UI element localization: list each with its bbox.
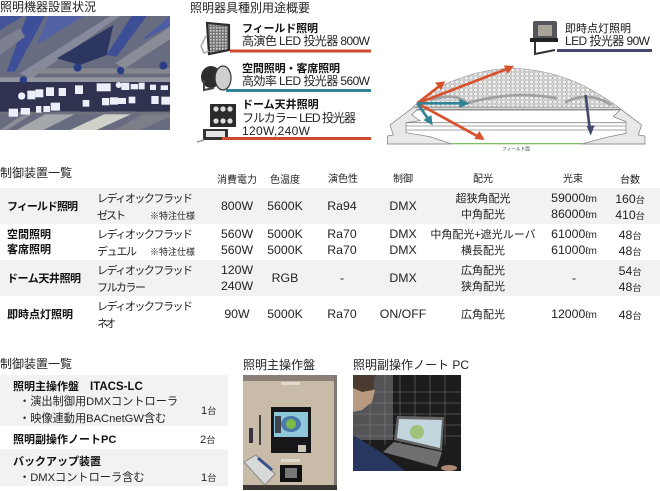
- heading: lighting installation status: 照明機器設置状況: [0, 0, 96, 14]
- table row: instant-on lighting: 12000ℓm: [551, 307, 597, 321]
- legend: dome ceiling lighting fixture: [197, 97, 371, 142]
- heading: control equipment list: 制御装置一覧: [0, 356, 72, 371]
- heading: control equipment table: 制御装置一覧: [0, 165, 72, 180]
- table row: space and seating lighting: デュエル: [97, 244, 137, 258]
- diagram: dome cross-section with light directions: [387, 65, 645, 152]
- table row: space and seating lighting: 客席照明: [7, 242, 51, 256]
- table row: space and seating lighting: 560W: [221, 243, 253, 257]
- list item: main lighting console: ・演出制御用DMXコントローラ: [19, 394, 178, 408]
- table row: instant-on lighting: [7, 299, 641, 330]
- table row: dome ceiling lighting: 48台: [619, 280, 641, 294]
- table row: field lighting: 59000ℓm: [551, 191, 597, 205]
- label: field lighting: フィールド照明: [242, 22, 318, 35]
- table row: instant-on lighting: ネオ: [97, 317, 116, 330]
- table row: field lighting: 86000ℓm: [551, 207, 597, 221]
- leader line: dome: [222, 137, 371, 140]
- table row: dome ceiling lighting: 240W: [221, 279, 253, 293]
- list item: sub-console notebook PC: 2台: [200, 434, 215, 446]
- list item: main lighting console: ・映像連動用BACnetGW含む: [19, 411, 166, 425]
- table row: instant-on lighting: 広角配光: [461, 307, 505, 321]
- table header: [217, 172, 640, 186]
- table row: instant-on lighting: 48台: [619, 308, 641, 322]
- spec: dome lighting wattage: 120W,240W: [242, 124, 311, 138]
- table header: 消費電力: [217, 173, 257, 186]
- table header: 配光: [473, 172, 493, 185]
- list item: sub-console notebook PC: [13, 432, 215, 446]
- list item: backup device: 1台: [201, 472, 216, 484]
- table row: space and seating lighting: ※特注仕様: [150, 246, 195, 257]
- table row: space and seating lighting: [7, 227, 641, 258]
- table row: space and seating lighting: 5000K: [267, 227, 304, 241]
- table row: instant-on lighting: 5000K: [267, 307, 304, 321]
- heading: sub-console notebook PC photo: 照明副操作ノート PC: [353, 357, 469, 372]
- spec: dome lighting type: フルカラー LED 投光器: [242, 110, 356, 125]
- table row: field lighting: 5600K: [267, 199, 304, 213]
- table row: field lighting: DMX: [389, 199, 417, 213]
- table row: instant-on lighting: ON/OFF: [380, 307, 427, 321]
- list item: backup device: ・DMXコントローラ含む: [19, 471, 145, 484]
- table row: space and seating lighting: レディオックフラッド: [97, 227, 193, 241]
- table header: 演色性: [328, 172, 358, 185]
- table header: 台数: [620, 173, 640, 186]
- photo: lights mounted on roof truss: [0, 16, 170, 130]
- table row: field lighting: [0, 188, 660, 224]
- table row: field lighting: レディオックフラッド: [97, 191, 193, 205]
- list item: main lighting console: 1台: [201, 405, 216, 417]
- table row: dome ceiling lighting: -: [340, 271, 344, 285]
- spec: space lighting: 高効率 LED 投光器 560W: [242, 73, 371, 88]
- legend: field lighting fixture: [201, 22, 371, 54]
- table row: instant-on lighting: レディオックフラッド: [97, 299, 193, 313]
- list item: main lighting console: [0, 375, 228, 426]
- table row: space and seating lighting: 空間照明: [7, 227, 51, 241]
- spec: instant-on lighting: LED 投光器 90W: [565, 33, 651, 48]
- list item: backup device: [0, 449, 228, 486]
- table row: space and seating lighting: 61000ℓm: [551, 227, 597, 241]
- table row: dome ceiling lighting: 狭角配光: [461, 279, 505, 293]
- table row: field lighting: 800W: [221, 199, 253, 213]
- table row: space and seating lighting: 48台: [619, 228, 641, 242]
- table row: field lighting: 410台: [615, 208, 645, 222]
- legend: instant-on lighting fixture: [530, 21, 652, 54]
- spec: field lighting: 高演色 LED 投光器 800W: [242, 33, 371, 48]
- table row: space and seating lighting: 560W: [221, 227, 253, 241]
- photo: main console panel: [243, 375, 337, 490]
- table row: dome ceiling lighting: ドーム天井照明: [7, 271, 81, 285]
- table row: dome ceiling lighting: 54台: [619, 264, 641, 278]
- table row: field lighting: 超狭角配光: [456, 191, 510, 205]
- table row: dome ceiling lighting: 120W: [221, 263, 253, 277]
- table row: field lighting: ※特注仕様: [150, 210, 195, 221]
- table row: space and seating lighting: 中角配光+遮光ルーバ: [430, 227, 536, 241]
- heading: fixture types and usage overview: 照明器具種別用途概要: [190, 1, 310, 15]
- table row: dome ceiling lighting: DMX: [389, 271, 417, 285]
- table row: field lighting: Ra94: [327, 199, 357, 213]
- icon: full colour fixtures: [197, 104, 236, 142]
- label: space and seating lighting: 空間照明・客席照明: [242, 61, 340, 75]
- arrows: light beams: [417, 65, 595, 140]
- label: instant-on lighting: 即時点灯照明: [565, 22, 631, 35]
- list item: sub-console notebook PC: 照明副操作ノートPC: [13, 432, 116, 446]
- table row: dome ceiling lighting: -: [572, 271, 576, 285]
- leader line: space: [226, 89, 371, 92]
- table row: space and seating lighting: Ra70: [327, 243, 357, 257]
- table row: field lighting: 中角配光: [461, 207, 505, 221]
- table row: space and seating lighting: DMX: [389, 243, 417, 257]
- table header: 制御: [393, 172, 413, 185]
- table row: space and seating lighting: 横長配光: [461, 243, 505, 257]
- table row: space and seating lighting: 5000K: [267, 243, 304, 257]
- list item: main lighting console: 照明主操作盤 ITACS-LC: [13, 379, 143, 393]
- leader line: instant-on: [557, 49, 652, 52]
- table header: 光束: [563, 172, 583, 185]
- table row: space and seating lighting: DMX: [389, 227, 417, 241]
- table row: field lighting: フィールド照明: [7, 200, 78, 213]
- table row: instant-on lighting: 即時点灯照明: [7, 307, 73, 321]
- table row: space and seating lighting: 61000ℓm: [551, 243, 597, 257]
- table row: instant-on lighting: 90W: [224, 307, 250, 321]
- list item: backup device: バックアップ装置: [13, 454, 101, 468]
- photo: operator with notebook PC: [353, 375, 461, 471]
- table row: dome ceiling lighting: レディオックフラッド: [97, 263, 193, 277]
- icon: instant floodlight: [530, 21, 558, 54]
- heading: main console photo: 照明主操作盤: [243, 357, 315, 372]
- table row: dome ceiling lighting: RGB: [272, 271, 298, 285]
- table row: space and seating lighting: 48台: [619, 244, 641, 258]
- table row: field lighting: ゼスト: [97, 209, 126, 222]
- table row: field lighting: 160台: [615, 192, 645, 206]
- label: dome ceiling lighting: ドーム天井照明: [242, 97, 319, 111]
- icon: field floodlight: [201, 23, 229, 54]
- table row: dome ceiling lighting: 広角配光: [461, 263, 505, 277]
- icon: high-bay fixture: [201, 66, 231, 90]
- leader line: field: [230, 50, 371, 52]
- table row: dome ceiling lighting: [0, 260, 660, 296]
- table row: dome ceiling lighting: フルカラー: [97, 281, 146, 294]
- field surface label: フィールド面: [502, 146, 530, 152]
- legend: space and seating lighting fixture: [201, 61, 371, 92]
- table header: 色温度: [270, 173, 300, 186]
- table row: space and seating lighting: Ra70: [327, 227, 357, 241]
- table row: instant-on lighting: Ra70: [327, 307, 357, 321]
